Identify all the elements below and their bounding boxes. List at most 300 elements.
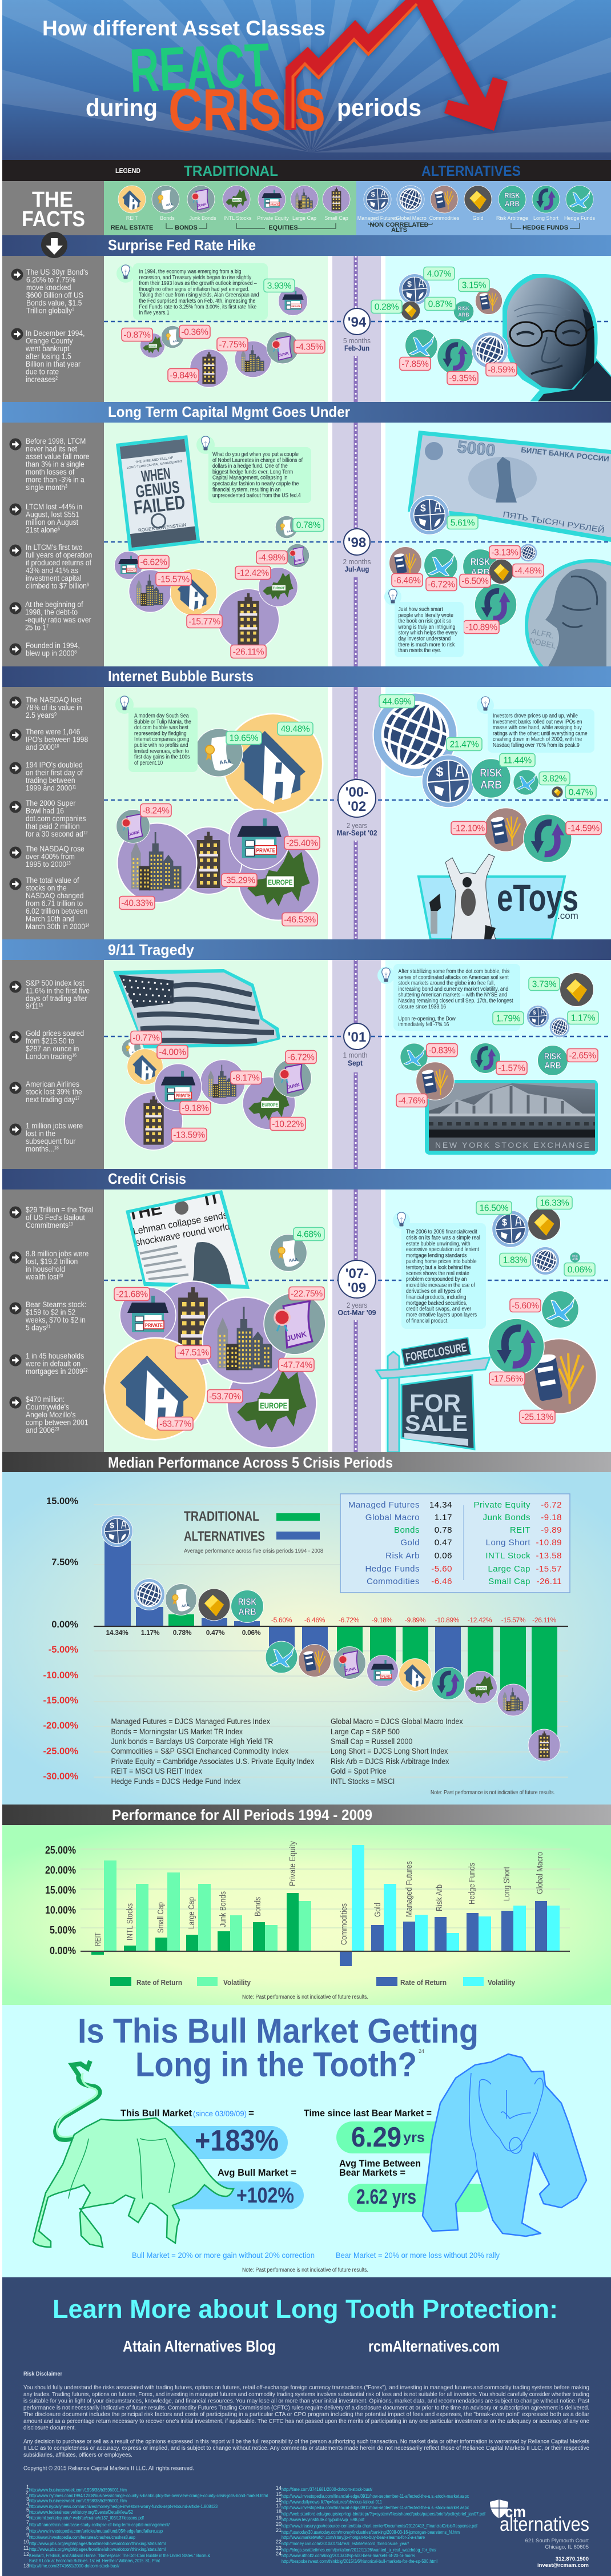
facts: -equity ratio was over [25,615,91,624]
icon: Bonds [122,1039,141,1058]
references, right column: 20 [276,2521,282,2527]
chart legend: TRADITIONAL [184,1509,259,1524]
value: -15.77% [188,617,220,627]
group label: hedge funds [511,223,580,231]
value [539,772,570,785]
foreclosure for-sale sign: FOR [409,1389,461,1417]
references, right column: 16 [276,2497,282,2503]
year marker 1994: '94 [348,315,367,330]
icon: Long Short [524,814,572,862]
value [289,1287,324,1300]
chart legend: Rate of Return [400,1978,447,1987]
ranking table: Large Cap [488,1564,530,1574]
facts: blew up in 2000 [26,649,74,658]
index definitions: Hedge Funds = DJCS Hedge Fund Index [111,1777,241,1786]
risk disclaimer: subsidiaries, affiliates, officers or employees. [23,2452,132,2458]
value: -46.53% [284,915,316,925]
callout: territory; but a look behind the [406,1264,471,1271]
group label: non correlated alts: ALTS [391,227,407,234]
value: 3.93% [267,281,292,291]
photo: New York Stock Exchange: NEW YORK STOCK EXCHANGE [435,1140,589,1150]
references, left column: http://www.investopedia.com/articles/mutualfund/05/hedgefundfailure.asp [29,2528,163,2534]
references, right column: http://usatoday30.usatoday.com/money/industries/banking/2008-03-16-jpmorgan-bearsterns_N.htm [282,2529,460,2535]
icon: Gold [560,973,593,1006]
icon: Risk [472,759,510,798]
value: -0.77% [132,1034,160,1043]
value [168,369,199,381]
bar value labels: 0.06% [242,1629,261,1637]
rotated asset labels: Long Short [502,1866,512,1901]
callout: spectacular fashion to nearly cripple the [212,480,299,487]
facts: 6 [87,582,89,588]
callout: dot.com bubble was best [134,725,188,730]
value: -63.77% [159,1420,191,1429]
icon: Long Short [471,1043,500,1073]
icon: Bonds [166,1584,196,1615]
bar value labels: 0.78% [173,1629,192,1637]
axis and grid: -25.00% [43,1746,78,1757]
facts: American Airlines [26,1079,79,1088]
value: -8.24% [142,806,170,815]
facts: In LTCM's first two [26,542,82,552]
callout: Nasdaq falling over 70% from its peak.9 [493,742,580,748]
callout: Taking their cue from rising yields, Alan Greenspan and [139,292,259,298]
facts: asset value fall more [26,452,90,461]
value [459,279,489,291]
callout: mortgage backed securities, [406,1300,467,1306]
icon: REIT: REIT [126,215,138,221]
ranking table [340,1494,570,1593]
legend: traditional asset icons [104,181,356,235]
bars [94,1541,568,1740]
value: 0.87% [428,299,453,310]
references, left column: http://www.investopedia.com/features/crashes/crashes8.asp [29,2534,135,2540]
facts: 21st alone [26,525,58,535]
icon: Commodities [484,808,528,851]
index definitions: Private Equity = Cambridge Associates U.S. Private Equity Index [111,1757,315,1766]
newspaper: The Times: TI [200,1188,219,1210]
facts: it produced returns of [26,558,91,567]
facts: The NASDAQ rose [26,844,85,853]
section: performance for all periods chart [2,1805,611,2005]
header [2,1805,611,1825]
definitions: Bear Market = 20% or more loss without 20% rally [336,2251,500,2260]
value: -4.76% [398,1096,425,1106]
definitions: Bull Market = 20% or more gain without 20% correction [132,2251,315,2260]
pill: 6.29 yrs: yrs [403,2130,425,2145]
value [464,620,499,634]
facts: move knocked [26,283,71,292]
icon: Large [497,1684,529,1716]
icon: Commodities [299,1645,331,1677]
facts: 194 IPO's doubled [26,760,83,769]
bull labels [120,2108,296,2178]
rotated asset labels: REIT [93,1932,103,1946]
facts: for a 30 second ad [26,829,83,838]
facts: from $215.50 to [26,1036,74,1046]
icon: Private [229,809,290,870]
callout: of financial product. [406,1317,448,1324]
facts: $159 to $2 in 52 [26,1308,75,1317]
value [493,1012,524,1024]
icon: Small [175,827,242,894]
value [157,1045,188,1059]
icon: Risk [570,1252,580,1263]
axis and grid: 0.00% [50,1945,76,1956]
references, right column: http://www.levyinstitute.org/pubs/wp_698.pdf [282,2517,365,2522]
bars: alternatives [340,1845,560,1966]
facts: from 6.71 trillion to [26,899,83,908]
value [138,555,169,569]
facts: 14 [85,923,90,928]
value [500,1253,530,1267]
bull labels: (since 03/09/09) [193,2109,247,2118]
facts: Founded in 1994, [26,641,80,650]
section header [2,235,611,256]
year marker 2000-02: 2 years [347,821,367,830]
value [187,614,222,628]
value [140,804,171,817]
facts: London trading [26,1052,72,1061]
value: 49.48% [281,724,310,734]
icon: Private [114,552,143,579]
icon: Commodities: Commodities [429,215,460,221]
references, left column: 7 [26,2519,29,2525]
value: -22.75% [291,1289,323,1299]
value [371,300,402,313]
facts: never had its net [26,444,77,453]
zero axis [81,1951,570,1952]
header: Internet Bubble Bursts: Internet Bubble Bursts [108,668,254,685]
icon: Junk [274,1059,311,1097]
value: -40.33% [121,899,153,908]
facts: 8 [74,649,77,655]
eToys box and mascot: eToys [497,877,578,919]
bull labels: This Bull Market [120,2108,192,2119]
year marker 1994: Feb-Jun [344,344,369,352]
value [529,978,560,990]
value [294,340,325,353]
ranking table: -26.11 [537,1577,562,1586]
rotated asset labels: Risk Arb [435,1884,444,1911]
newspaper: The Times: Lehman collapse sends [132,1209,228,1237]
ranking table: -10.89 [536,1538,562,1548]
facts [11,267,89,384]
group label: real estate: REAL ESTATE [111,224,153,231]
facts: more than -3% in a [26,475,85,484]
icon: INTL Stocks: INTL Stocks [224,215,252,221]
facts: 11 [72,784,76,790]
note: Note: Past performance is not indicative of future results. [431,1790,555,1796]
icon: Gold: Gold [472,215,484,221]
facts: NASDAQ changed [26,891,83,900]
facts: in household [26,1264,65,1273]
value: -21.68% [116,1289,148,1300]
facts: that paid 2 million [26,822,80,831]
icon: Bonds: Bonds [160,215,175,221]
value [256,550,287,564]
icon: Junk [264,1293,325,1355]
references, left column: 8 [26,2526,29,2531]
icon: Macro [519,544,537,562]
callout: dollars in a hedge fund. One of the [212,463,288,469]
callout: derivatives on all types of [406,1288,461,1294]
value: 21.47% [450,740,479,749]
callout: Nasdaq remaining closed until Sep. 17th, the longest [399,998,513,1004]
year marker 1998 [343,529,371,577]
facts: Trillion globally [26,306,72,315]
chart legend: Rate of Return [136,1978,182,1987]
value [496,1061,527,1075]
value [226,731,262,745]
risk disclaimer: disclosure document. [23,2425,76,2432]
header: Median Performance Across 5 Crisis Periods [108,1454,393,1471]
references, right column: 21 [276,2527,282,2533]
banknote: 5000 rubles: БИЛЕТ БАНКА РОССИИ [521,445,609,463]
index definitions [111,1717,463,1786]
value: -47.51% [177,1348,209,1358]
value [447,738,482,750]
value [207,1390,243,1402]
icon: Large Cap [235,341,271,377]
facts [9,436,92,658]
facts: and 2000 [26,742,55,751]
icon: Junk Bonds [187,186,216,221]
value [567,1048,598,1062]
bar value labels: -12.42% [468,1616,492,1624]
references, left column: 6 [26,2513,29,2519]
icon: Bonds [161,325,184,348]
callout: though no other signs of inflation had yet emerged. [139,286,250,292]
icon: Bonds [270,1235,307,1271]
value [286,1051,316,1063]
risk disclaimer: is suitable for you in light of your circumstances, knowledge, and financial resources. You may lose all or more than your initial investment. Opinions, market data, and recommendations are subject to change without notice. Past [23,2397,589,2404]
icon: Large [200,1060,245,1104]
value [231,1071,262,1084]
icon: Long Short: Long Short [533,215,559,221]
header: 9/11 Tragedy [2,939,611,960]
value: -9.35% [449,373,476,384]
references, left column [23,2484,268,2569]
icon: INTL [259,568,298,606]
callout: public with no profits and [134,742,188,748]
ranking table: Small Cap [488,1577,530,1586]
callout: In 1994, the economy was emerging from a big [139,268,242,275]
callout: mortgage lending standards [406,1252,467,1259]
banknote: 5000 rubles [408,431,611,542]
facts: 10 [55,744,59,749]
foreclosure for-sale sign: SALE [405,1411,468,1436]
value [520,1410,555,1423]
callout [115,696,198,772]
rotated asset labels: Hedge Funds [467,1863,477,1904]
value [158,1417,193,1430]
icon: Small Cap [190,349,228,387]
year marker 2001: 1 month [343,1051,368,1059]
panel background [2,1472,611,1805]
risk disclaimer: performance is not necessarily indicative of future results. Commodity Futures Trading Commission (CFTC) rules require delivery of a disclosure document at or prior to the time an advisory or subscription agreement is delivered. [23,2404,589,2411]
references, right column: http://www.marketwatch.com/story/jp-morgan-to-buy-bear-stearns-for-2-a-share [282,2534,425,2540]
axis and grid: 5.00% [50,1924,76,1936]
banknote: 5000 rubles: ПЯТЬ ТЫСЯЧ РУБЛЕЙ [503,509,605,535]
callout: there is much more to risk [399,641,455,648]
callout: wrong is truly an intriguing [398,624,455,630]
facts: full years of operation [26,550,92,560]
value [270,1117,306,1131]
index definitions: Global Macro = DJCS Global Macro Index [331,1717,463,1726]
references, right column: http://web.stanford.edu/group/siepr/cgi-bin/siepr/?q=system/files/shared/pubs/papers/briefs/policybrief_jan07.pdf [282,2511,486,2517]
bear illustration [423,2054,586,2236]
icon: Managed Futures [399,274,430,305]
contact details: 312.870.1500 [556,2556,589,2562]
facts: $470 million: [26,1395,65,1404]
header: Long Term Capital Mgmt Goes Under: Long Term Capital Mgmt Goes Under [108,403,350,420]
icon: Hedge [424,549,457,582]
axis and grid: 25.00% [45,1844,76,1856]
value [379,694,415,708]
group label: non correlated alts: NON CORRELATED [369,222,429,228]
ranking table: -6.46 [431,1577,452,1586]
callout: excessive speculation and lenient [406,1247,479,1252]
index definitions: Junk bonds = Barclays US Corporate High Yield TR [111,1737,273,1746]
references, right column: 14 [276,2485,282,2491]
ranking table: Long Short [486,1538,530,1548]
pill: +102%: +102% [236,2184,294,2208]
callout: What do you get when you put a couple [212,451,299,457]
callout: financial system, resulting in an [212,487,280,492]
value [293,519,324,531]
year marker 2000-02: Mar-Sept '02 [337,829,377,837]
facts: wealth lost [26,1272,58,1281]
icon: down arrow badge [41,232,67,258]
facts: Bowl had 16 [26,806,64,815]
dashed divider [104,1280,611,1281]
banknote: 5000 rubles: 5000 [456,437,496,460]
risk disclaimer: Copyright © 2015 Reliance Capital Markets II LLC. All rights reserved. [23,2465,194,2471]
bars: traditional [91,1860,311,1955]
photo: New York Stock Exchange [425,1080,598,1155]
ranking table: Global Macro [365,1513,420,1522]
icon: Small [151,1281,235,1366]
callout: credit default swaps, and ever [406,1306,471,1312]
newspaper: The Times [126,1188,250,1289]
chart legend [184,1509,323,1554]
value: -8.17% [232,1074,260,1083]
facts: next trading day [26,1095,75,1104]
callout: pushing home prices into bubble [406,1258,477,1264]
group label: hedge funds: HEDGE FUNDS [522,224,568,231]
facts: Angelo Mozillo's [26,1410,76,1419]
value: -7.85% [401,360,429,369]
ranking table: 0.06 [435,1551,452,1561]
ranking table: -13.58 [536,1551,562,1561]
value [179,325,210,338]
callout [384,588,464,657]
callout: represented by fledgling [134,730,187,737]
rotated asset labels: Bonds [253,1897,263,1916]
chart legend: Average performance across five crisis periods 1994 - 2008 [184,1548,323,1554]
pill: 6.29 yrs: 6.29 [351,2122,401,2153]
facts: trading between [26,775,75,785]
facts: 1 million jobs were [26,1121,83,1130]
callout: Upon re-opening, the Dow [399,1015,456,1022]
callout: more creative layers upon layers [406,1312,477,1318]
references, left column: 9 [26,2532,29,2538]
facts: 1 [72,307,74,312]
value [131,1031,162,1044]
icon: Gold [528,1208,560,1240]
facts: than 3% in a single [26,460,85,469]
references, right column: 23 [276,2545,282,2551]
icon: Large Cap [291,186,318,221]
facts [9,1205,94,1434]
callout [196,436,311,503]
book: When Genius Failed: THE RISE AND FALL OF [135,456,174,464]
header: Credit Crisis: Credit Crisis [108,1170,186,1187]
facts: 25 to 1 [25,623,46,632]
icon: Junk [333,1647,365,1679]
title word during: during [86,94,158,122]
contact details [525,2538,589,2569]
icon: Hedge Funds [564,186,596,221]
facts: Orange County [26,336,73,345]
callout: stock markets around the globe into free fall, [399,980,495,986]
value [114,1287,150,1301]
year marker 2000-02: '00- [345,785,368,800]
icon: Long Short [437,339,473,374]
references, right column: http://time.com/3741681/2000-dotcom-stock-bust/ [282,2486,373,2492]
value: -15.57% [158,574,190,585]
value: -6.46% [393,576,421,586]
icon: Small [124,1092,183,1150]
facts: Commitments [26,1220,69,1229]
facts: 9 [54,712,57,717]
rotated asset labels: INTL Stocks [125,1903,135,1940]
value [396,1094,427,1107]
book: When Genius Failed [116,435,200,552]
heading: 24 [419,2048,424,2054]
references, right column: http://www.investopedia.com/financial-edge/0911/how-september-11-affected-the-u.s.-stock-market.aspx [282,2505,469,2510]
callout: unprecedented bailout from the US fed.4 [212,492,301,499]
icon: Bonds [152,186,179,221]
axis and grid: 20.00% [45,1864,76,1876]
risk disclaimer [23,2370,589,2471]
value: 1.79% [496,1014,521,1023]
dashed divider [104,541,611,542]
facts: 11.6% in the first five [26,986,90,995]
value [424,267,455,280]
icon: INTL [465,1671,497,1703]
value [278,722,313,736]
callout: scenes shows the real estate [406,1270,469,1276]
risk disclaimer: Risk Disclaimer [23,2370,62,2377]
value [284,836,320,850]
panel columns: facts, traditional, timeline, alternatives [2,256,611,1452]
value: -4.00% [159,1047,186,1058]
facts: were in default on [25,1359,81,1368]
rotated asset labels: Large Cap [187,1897,196,1929]
value [282,913,317,926]
dashed divider [104,321,611,322]
Nobel medal [525,559,611,666]
value [537,1196,572,1209]
heading [78,2012,479,2084]
value [171,1128,207,1141]
value [566,821,601,835]
icon: Risk Arb [463,549,497,584]
pill: 2.62 yrs [348,2184,491,2212]
value [392,573,423,587]
